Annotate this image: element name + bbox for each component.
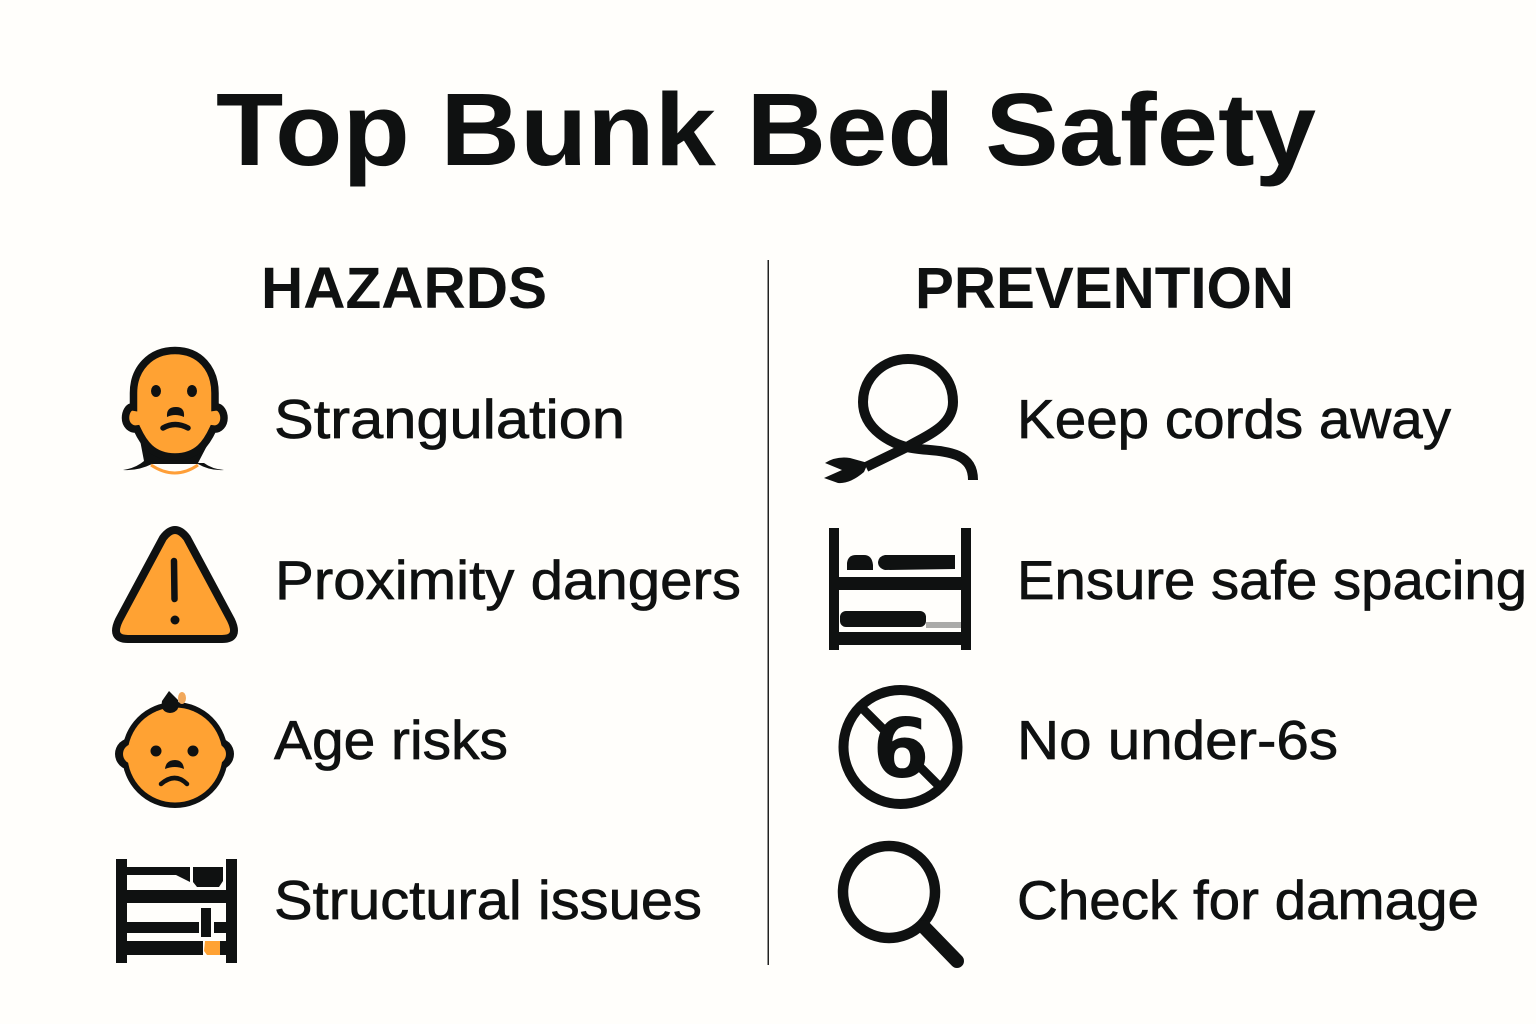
icon: strangulation face [123,350,224,473]
label: keep cords away: Keep cords away [1017,388,1452,450]
title: Top Bunk Bed Safety [216,72,1316,187]
label: ensure safe spacing: Ensure safe spacing [1017,549,1527,611]
label: no under-6s: No under-6s [1017,709,1338,771]
heading: hazards: HAZARDS [261,256,547,321]
icon: magnifying glass [843,846,957,961]
heading: prevention: PREVENTION [915,256,1294,321]
label: age risks: Age risks [274,709,508,771]
panel: prevention [824,256,1527,961]
icon: damaged bunk bed [116,859,237,963]
label: proximity dangers: Proximity dangers [275,549,741,611]
icon: baby face [115,691,234,808]
icon: bunk bed spacing [829,528,971,650]
label: structural issues: Structural issues [274,869,702,931]
panel: hazards [115,256,741,963]
label: strangulation: Strangulation [274,388,625,450]
icon: warning triangle [116,530,234,639]
icon: cord loop [824,359,973,483]
label: check for damage: Check for damage [1017,869,1479,931]
divider [768,260,769,965]
icon: no under six [844,690,958,804]
icon: no under six: 6 [872,702,930,797]
